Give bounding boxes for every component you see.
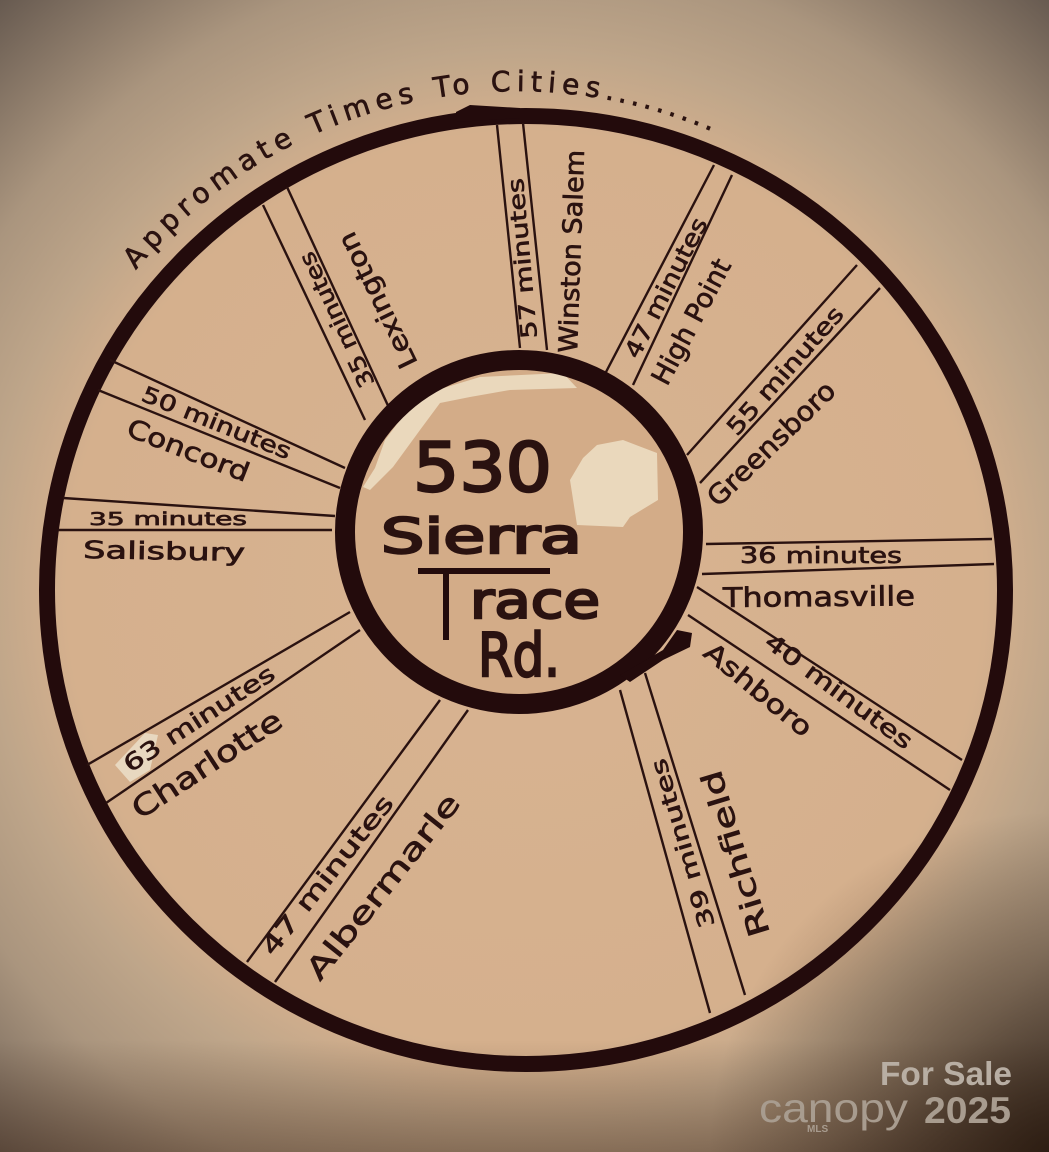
watermark: For Sale: For Sale bbox=[880, 1055, 1012, 1092]
spoke label: Thomasville: 36 minutes bbox=[740, 544, 902, 569]
ink blot on hub ring bbox=[620, 630, 692, 682]
address: Sierra: Sierra bbox=[381, 509, 582, 565]
spoke label: Ashboro: 40 minutes bbox=[759, 629, 917, 755]
peeled paper patch top bbox=[363, 373, 577, 490]
watermark: MLS: MLS bbox=[807, 1124, 828, 1135]
address: Trace T bar bbox=[418, 571, 550, 640]
spoke label: Thomasville bbox=[722, 544, 915, 614]
spoke label: High Point: High Point bbox=[646, 254, 738, 390]
spoke label: Richfield: Richfield bbox=[694, 766, 777, 941]
spoke label: Thomasville: Thomasville bbox=[722, 581, 915, 614]
peeled paper patch right bbox=[570, 440, 658, 527]
watermark: 2025: 2025 bbox=[924, 1090, 1011, 1131]
spoke lines bbox=[58, 123, 994, 1013]
spoke label: Richfield bbox=[647, 756, 777, 941]
spoke label: Albermarle: Albermarle bbox=[299, 787, 467, 986]
spoke label: Richfield: 39 minutes bbox=[647, 756, 721, 930]
watermark: canopy: canopy bbox=[759, 1085, 909, 1131]
spoke label: Salisbury: Salisbury bbox=[83, 536, 245, 567]
spoke label: Greensboro bbox=[701, 302, 850, 513]
address: 530: 530 bbox=[413, 429, 552, 508]
outer ring bbox=[47, 116, 1005, 1064]
spoke label: Salisbury: 35 minutes bbox=[89, 509, 247, 530]
spoke label: Concord: Concord bbox=[122, 414, 253, 489]
spoke label: Winston Salem bbox=[504, 149, 591, 353]
spoke label: Greensboro: 55 minutes bbox=[722, 302, 850, 441]
spoke label: Albermarle bbox=[256, 787, 467, 986]
spoke label: High Point: 47 minutes bbox=[620, 214, 713, 363]
background: bottom shading bbox=[0, 1040, 1049, 1152]
spoke label: Lexington: 35 minutes bbox=[295, 248, 380, 391]
address: Rd.: Rd. bbox=[478, 621, 560, 691]
spoke label: Albermarle: 47 minutes bbox=[256, 790, 399, 961]
spoke label: Lexington: Lexington bbox=[332, 227, 424, 373]
ring ink bump bbox=[456, 105, 520, 122]
spoke label: Greensboro: Greensboro bbox=[701, 375, 842, 513]
spoke label: Salisbury bbox=[83, 509, 247, 567]
spoke label: Concord: 50 minutes bbox=[138, 382, 295, 465]
spoke label: Lexington bbox=[295, 227, 424, 391]
spoke label: High Point bbox=[620, 214, 738, 390]
spoke label: Charlotte bbox=[119, 661, 289, 826]
spoke label: Winston Salem: 57 minutes bbox=[504, 177, 543, 340]
spoke label: Ashboro: Ashboro bbox=[698, 637, 818, 744]
spoke label: Charlotte: 63 minutes bbox=[119, 661, 280, 778]
spoke label: Winston Salem: Winston Salem bbox=[554, 149, 591, 353]
spoke label: Ashboro bbox=[698, 629, 917, 755]
spoke label: Charlotte: Charlotte bbox=[125, 703, 289, 826]
small paper patch under 63 bbox=[115, 733, 158, 782]
address: Trace: race bbox=[470, 572, 600, 630]
centre hub bbox=[345, 360, 693, 704]
spoke label: Concord bbox=[122, 382, 295, 489]
